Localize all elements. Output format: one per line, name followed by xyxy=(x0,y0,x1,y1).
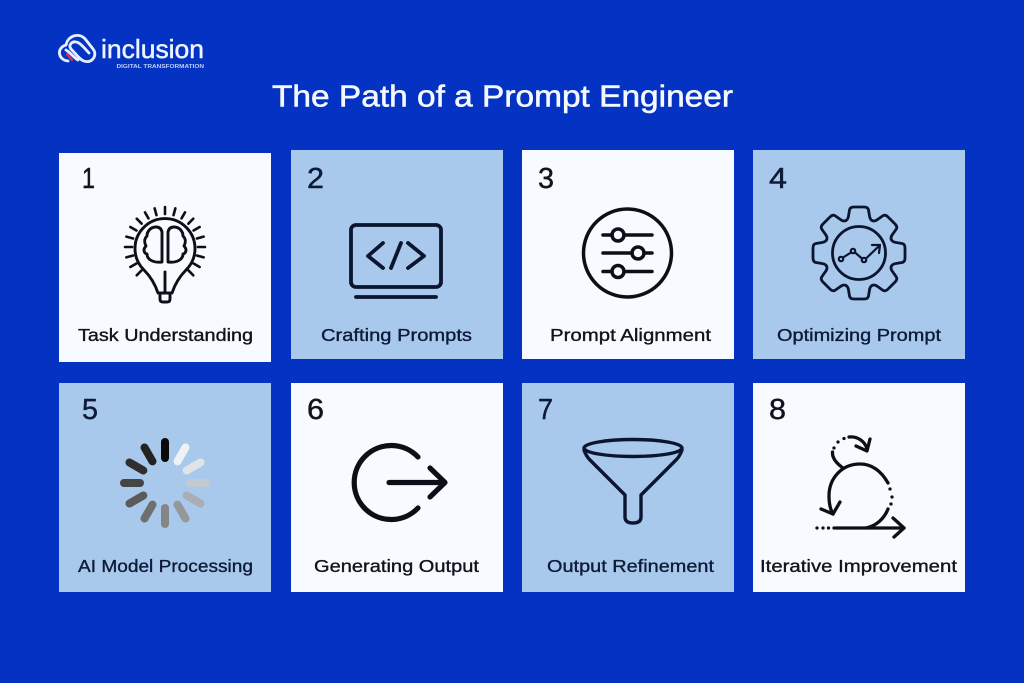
logo mark xyxy=(59,35,95,62)
icon: sliders in circle xyxy=(584,209,672,297)
icon: exit arrow from open circle xyxy=(354,446,445,520)
label 2: Crafting Prompts xyxy=(321,325,472,345)
number 6: 6 xyxy=(307,394,324,426)
number 5: 5 xyxy=(82,394,98,426)
number 4: 4 xyxy=(769,163,787,195)
logo wordmark: inclusion xyxy=(101,34,204,64)
icon: funnel xyxy=(584,440,682,523)
panel: 7 Output Refinement xyxy=(522,383,734,592)
panel: 2 Crafting Prompts xyxy=(291,150,503,359)
icon: gear with rising chart xyxy=(813,207,905,299)
icon: light bulb with brain xyxy=(125,207,205,302)
number 7: 7 xyxy=(538,394,553,426)
panel: 6 Generating Output xyxy=(291,383,503,592)
label 3: Prompt Alignment xyxy=(550,325,711,345)
panel: 5 AI Model Processing xyxy=(59,383,271,592)
icon: iterative loop arrows xyxy=(817,437,904,537)
number 2: 2 xyxy=(307,163,324,195)
panel: 8 Iterative Improvement xyxy=(753,383,965,592)
panel: 3 Prompt Alignment xyxy=(522,150,734,359)
number 8: 8 xyxy=(769,394,786,426)
number 3: 3 xyxy=(538,163,554,195)
label 5: AI Model Processing xyxy=(78,556,253,576)
logo: inclusion xyxy=(59,34,204,70)
panel: 4 Optimizing Prompt xyxy=(753,150,965,359)
label 8: Iterative Improvement xyxy=(760,556,957,576)
title: The Path of a Prompt Engineer xyxy=(272,80,733,114)
number 1: 1 xyxy=(82,163,95,195)
label 6: Generating Output xyxy=(314,556,479,576)
icon: loading spinner xyxy=(124,442,206,524)
icon: code monitor xyxy=(351,225,441,297)
logo tagline: DIGITAL TRANSFORMATION xyxy=(116,64,204,70)
panel: 1 Task Understanding xyxy=(59,153,271,362)
label 7: Output Refinement xyxy=(547,556,714,576)
label 4: Optimizing Prompt xyxy=(777,325,941,345)
label 1: Task Understanding xyxy=(78,325,253,345)
